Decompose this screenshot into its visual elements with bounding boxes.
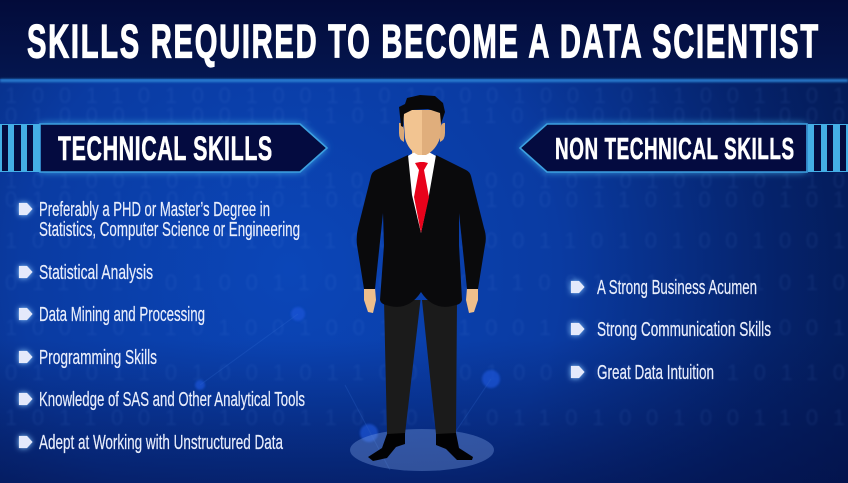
list: technical skills [19,199,305,454]
panel: technical skills banner [0,124,327,172]
bullet c: Great Data Intuition [597,362,714,384]
bullet a [571,277,757,299]
title: SKILLS REQUIRED TO BECOME A DATA SCIENTIST [27,17,818,68]
jacket [357,155,486,307]
binary pattern background [5,83,845,430]
list: non technical skills [571,277,771,384]
shirt [408,150,436,235]
bullet 3 [19,304,205,326]
shoes [368,433,473,461]
bullet 6 [19,432,284,454]
face [403,110,422,155]
bullet 1: Preferably a PHD or Master’s Degree in [39,199,270,221]
tie [414,162,429,233]
binary pattern background: 10100101001110101000101010010110 [5,168,845,193]
neck [412,140,430,160]
figure: data scientist [357,95,486,461]
binary pattern background: 01001101001011001010010011010110 [5,360,845,385]
bullet 6: Adept at Working with Unstructured Data [39,432,284,454]
binary pattern background: 01000110010110100110100010011000 [5,103,845,128]
binary pattern background: 01101001001101001011001010011010 [5,270,845,295]
binary pattern background: 10110010100110100101101001001101 [5,405,845,430]
bullet 2: Statistical Analysis [39,262,153,284]
heading: non technical skills: NON TECHNICAL SKILLS [555,132,794,166]
floor spotlight ellipse [350,429,494,471]
header band [0,0,848,82]
ears [399,123,445,142]
bullet c [571,362,714,384]
bullet 1: Statistics, Computer Science or Engineering [39,219,300,241]
bullet a: A Strong Business Acumen [597,277,757,299]
bullet 4: Programming Skills [39,347,157,369]
panel: non technical skills banner [520,124,848,172]
binary pattern background: 10010011010110010100110101001001 [5,228,845,253]
binary pattern background: 10011010010011010001001011001101 [5,83,845,108]
bullet 1 [19,199,300,241]
hair [399,95,445,127]
bullet 2 [19,262,153,284]
trousers [384,300,457,434]
bullet 5: Knowledge of SAS and Other Analytical Tools [39,389,305,411]
bullet 4 [19,347,157,369]
bullet b: Strong Communication Skills [597,319,771,341]
network nodes [195,307,500,470]
binary pattern background: 01001000110100110010001101000101 [5,187,845,212]
bullet 3: Data Mining and Processing [39,304,205,326]
hands [364,288,478,313]
heading: technical skills: TECHNICAL SKILLS [58,130,272,168]
bullet 5 [19,389,305,411]
binary pattern background: 10010110100100110100101100101001 [5,315,845,340]
bullet b [571,319,771,341]
